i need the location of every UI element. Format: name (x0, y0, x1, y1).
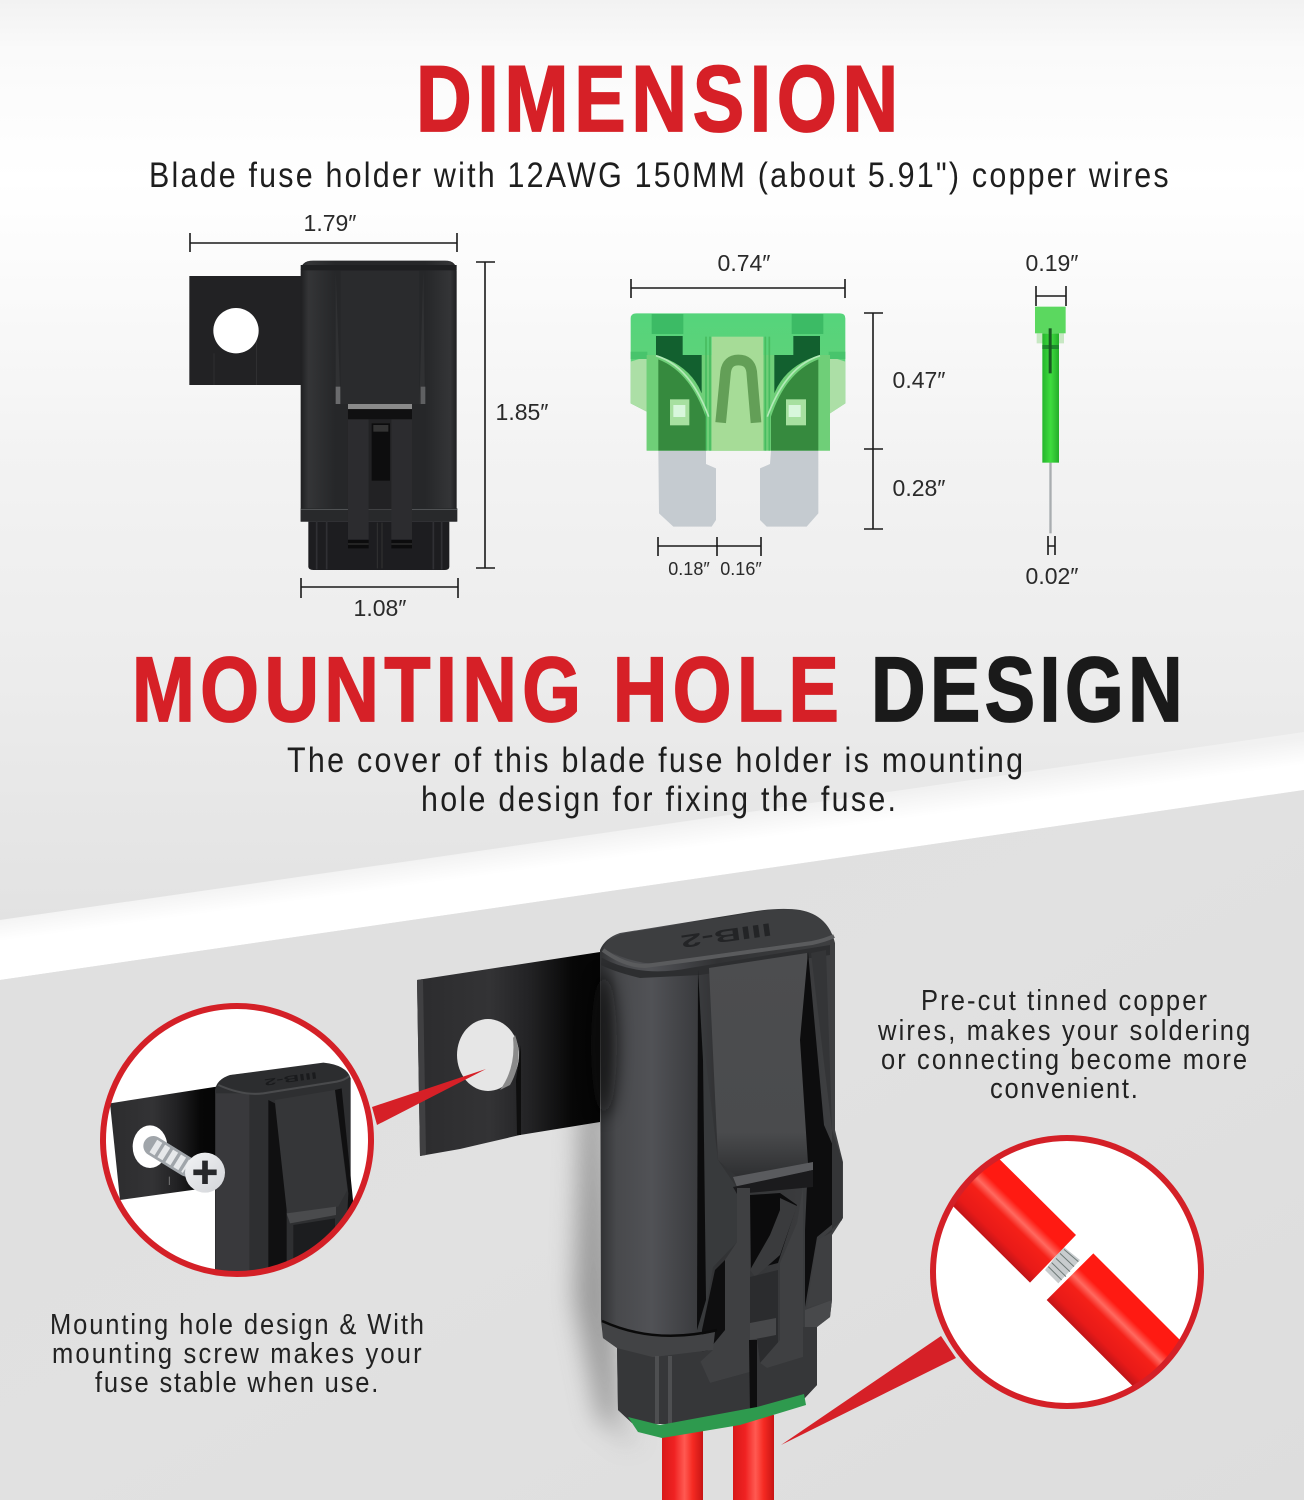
fuse drawing (631, 313, 845, 527)
holder drawing (189, 261, 457, 570)
dimension: fuse width 0.74: 0.74″ (718, 250, 770, 276)
callout: pre-cut tinned copper wires: Pre-cut tinned copper (921, 983, 1207, 1016)
clip and latch (750, 1193, 797, 1270)
front panel (709, 953, 822, 1177)
title: mounting hole design: DESIGN (871, 638, 1183, 741)
title: mounting hole design: MOUNTING HOLE (132, 638, 839, 741)
subtitle: wire specification: Blade fuse holder with 12AWG 150MM (about 5.91") copper wires (149, 155, 1169, 194)
description: mounting hole: hole design for fixing the fuse. (421, 779, 896, 818)
base ring (602, 1322, 715, 1357)
dimension: pin 0.02 (1026, 536, 1078, 589)
moulded mark: IIIB-2 (679, 919, 773, 952)
cap top surface (603, 909, 832, 963)
detail circle: mounting screw (101, 1004, 373, 1293)
dimension: fuse width 0.74 (631, 250, 845, 298)
screw and hole (133, 1125, 225, 1193)
dimension: overall width 1.79 (190, 210, 457, 252)
blade fuse side view with dimensions (1026, 250, 1078, 589)
dimension: heights 0.47 and 0.28: 0.28″ (893, 475, 945, 501)
dimension: pin 0.02: 0.02″ (1026, 563, 1078, 589)
callout: pre-cut tinned copper wires: wires, makes your soldering (877, 1013, 1250, 1046)
shoulder shading (591, 973, 617, 1117)
dimension: heights 0.47 and 0.28: 0.47″ (893, 367, 945, 393)
title: mounting hole design (132, 638, 1183, 741)
connector (617, 1327, 817, 1425)
callout: mounting hole and screw: Mounting hole design & With (50, 1307, 424, 1340)
holder in circle (215, 1063, 353, 1293)
holder shadow (575, 1090, 640, 1440)
callout: mounting hole and screw: mounting screw makes your (52, 1336, 422, 1369)
description: mounting hole: The cover of this blade fuse holder is mounting (287, 740, 1023, 779)
dimension: heights 0.47 and 0.28 (864, 313, 945, 529)
title: dimension: DIMENSION (416, 47, 898, 152)
fuse holder front view with dimensions (189, 210, 548, 621)
callout: pre-cut tinned copper wires: convenient. (990, 1071, 1138, 1104)
holder in circle: IIIB-2 (264, 1070, 318, 1087)
pointer to bracket hole (372, 1069, 486, 1125)
description: mounting hole (287, 740, 1023, 818)
callout: mounting hole and screw: fuse stable when use. (95, 1365, 378, 1398)
dimension: thickness 0.19: 0.19″ (1026, 250, 1078, 276)
dimension: thickness 0.19 (1026, 250, 1078, 306)
dimension: blade widths 0.18 and 0.16: 0.16″ (720, 559, 762, 579)
cut wire upper (954, 1160, 1076, 1282)
exposed copper strands (1045, 1247, 1080, 1283)
red wires (662, 1415, 774, 1500)
dimension: base width 1.08: 1.08″ (354, 595, 406, 621)
cut wire lower (1046, 1253, 1180, 1386)
bracket in circle (110, 1087, 217, 1200)
main fuse holder product image (417, 909, 843, 1500)
lower right body (807, 1232, 832, 1308)
dimension: height 1.85: 1.85″ (496, 399, 548, 425)
blade fuse front view with dimensions (631, 250, 945, 579)
holder body (591, 909, 843, 1438)
green seal (628, 1394, 806, 1438)
dimension: height 1.85 (476, 262, 548, 568)
callout: mounting hole and screw (50, 1307, 424, 1398)
dimension: base width 1.08 (301, 578, 458, 621)
side fuse drawing (1035, 307, 1066, 533)
mounting bracket with hole (417, 952, 600, 1156)
dimension: blade widths 0.18 and 0.16: 0.18″ (668, 559, 710, 579)
detail circle: tinned copper wires (920, 1127, 1203, 1410)
callout: pre-cut tinned copper wires (877, 983, 1250, 1104)
dimension: overall width 1.79: 1.79″ (304, 210, 356, 236)
dimension: blade widths 0.18 and 0.16 (658, 537, 762, 579)
callout: pre-cut tinned copper wires: or connecting become more (881, 1042, 1247, 1075)
pointer to wire detail (781, 1336, 956, 1445)
